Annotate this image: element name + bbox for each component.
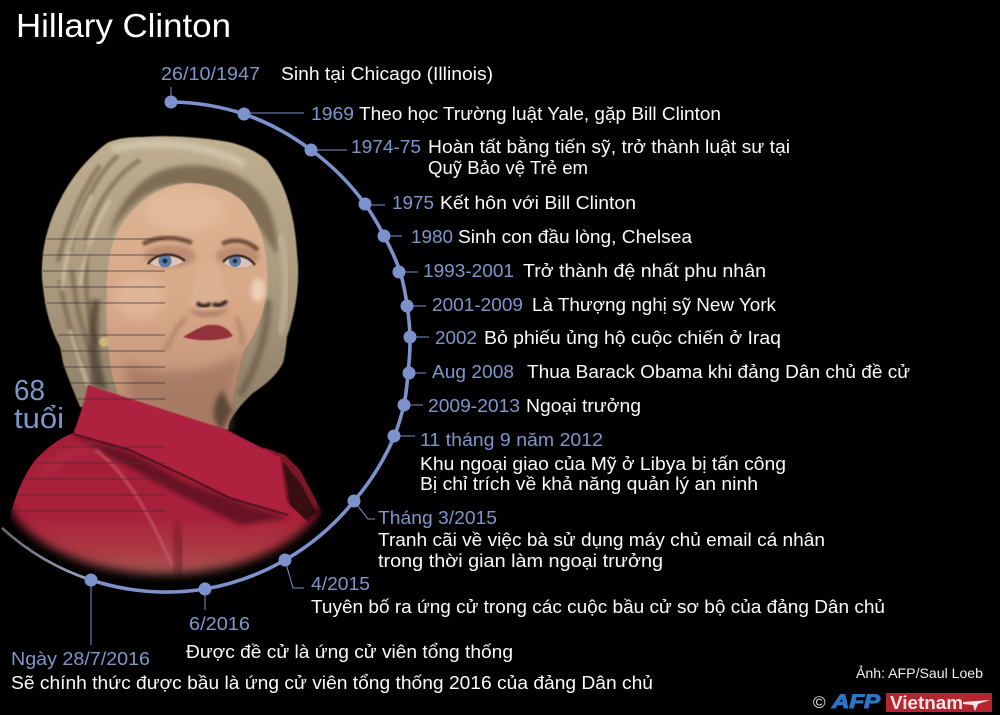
event: 1974-75: Hoàn tất bằng tiến sỹ, trở thành luật sư tại — [428, 136, 790, 157]
forehead highlight — [148, 197, 222, 228]
lips — [183, 325, 233, 340]
event: 2002: Bỏ phiếu ủng hộ cuộc chiến ở Iraq — [484, 328, 781, 348]
eye socket shade — [144, 245, 196, 267]
cheek highlights — [116, 276, 164, 320]
nose — [192, 275, 225, 308]
event: 2001-2009: Là Thượng nghị sỹ New York — [532, 295, 777, 315]
event: 1974-75: 1974-75 — [351, 137, 421, 157]
eyebrows — [143, 238, 258, 250]
age label — [14, 375, 64, 435]
logo: AFP Vietnam+: © — [813, 693, 826, 712]
event: 2009-2013: Ngoại trưởng — [526, 396, 641, 416]
portrait lines — [10, 239, 165, 511]
hair — [42, 136, 298, 427]
event: 3/2015: Tháng 3/2015 — [378, 508, 497, 528]
event: 2009-2013 — [428, 396, 641, 416]
event: 3/2015: Tranh cãi về việc bà sử dụng máy chủ email cá nhân — [378, 530, 825, 550]
sleeve seam — [95, 450, 172, 565]
event: 11/9/2012: Bị chỉ trích về khả năng quản lý an ninh — [420, 474, 758, 494]
event: 4/2015: Tuyên bố ra ứng cử trong các cuộc bầu cử sơ bộ của đảng Dân chủ — [311, 597, 885, 617]
event: birth: Sinh tại Chicago (Illinois) — [281, 64, 493, 84]
age label: 68 — [14, 375, 45, 407]
event: 2002: 2002 — [435, 328, 477, 348]
event: 1974-75: Quỹ Bảo vệ Trẻ em — [428, 158, 588, 178]
event: 4/2015: 4/2015 — [311, 574, 370, 594]
event: birth: 26/10/1947 — [161, 64, 260, 84]
event: 1993-2001 — [423, 261, 766, 281]
timeline dots — [84, 96, 416, 596]
event: 6/2016: 6/2016 — [189, 614, 250, 634]
logo: AFP Vietnam+ — [813, 692, 992, 713]
event: Aug 2008: Thua Barack Obama khi đảng Dân chủ đề cử — [527, 362, 910, 382]
event: 3/2015 — [378, 508, 825, 571]
event: 1969: 1969 — [311, 104, 354, 124]
event: 3/2015: trong thời gian làm ngoại trưởng — [378, 551, 663, 571]
connector lines — [91, 87, 429, 645]
event: birth — [161, 64, 493, 84]
earring — [99, 337, 109, 347]
event: 1975: Kết hôn với Bill Clinton — [440, 193, 636, 213]
event: 1980: Sinh con đầu lòng, Chelsea — [458, 227, 693, 247]
event: 11/9/2012: Khu ngoại giao của Mỹ ở Libya bị tấn công — [420, 454, 786, 474]
face and neck — [99, 183, 267, 432]
event: 2001-2009: 2001-2009 — [432, 295, 523, 315]
smile lines — [166, 318, 242, 350]
event: Aug 2008: Aug 2008 — [432, 362, 514, 382]
event: 2001-2009 — [432, 295, 777, 315]
collar shadow — [72, 436, 288, 525]
parting shadow — [108, 165, 277, 255]
event: 1975: 1975 — [392, 193, 434, 213]
logo: AFP Vietnam+: AFP — [831, 692, 880, 713]
event: 6/2016: Được đề cử là ứng cử viên tổng thống — [186, 642, 513, 662]
event: 1993-2001: 1993-2001 — [423, 261, 514, 281]
event: 11/9/2012 — [420, 430, 786, 494]
event: 1993-2001: Trở thành đệ nhất phu nhân — [523, 261, 766, 281]
event: 11/9/2012: 11 tháng 9 năm 2012 — [420, 430, 603, 450]
event: 28/7/2016: Sẽ chính thức được bầu là ứng cử viên tổng thống 2016 của đảng Dân chủ — [11, 673, 653, 693]
eyes — [150, 256, 183, 267]
jacket — [10, 384, 322, 582]
portrait photo — [0, 136, 330, 600]
event: 2009-2013: 2009-2013 — [428, 396, 520, 416]
photo credit: Ảnh: AFP/Saul Loeb — [856, 665, 983, 681]
collar — [73, 385, 288, 515]
arc tail — [2, 528, 91, 580]
age label: tuổi — [14, 403, 64, 435]
logo: AFP Vietnam+: Vietnam — [890, 693, 963, 713]
event: 4/2015 — [311, 574, 885, 617]
right back collar — [263, 447, 321, 522]
event: 1980: 1980 — [411, 227, 453, 247]
event: 6/2016 — [186, 614, 513, 662]
event: 28/7/2016: Ngày 28/7/2016 — [11, 649, 150, 669]
event: 1974-75 — [351, 136, 790, 178]
event: 28/7/2016 — [11, 649, 653, 693]
title: Hillary Clinton — [16, 7, 231, 44]
hair strands — [58, 155, 140, 365]
event: 1969: Theo học Trường luật Yale, gặp Bill Clinton — [359, 104, 721, 124]
timeline arc — [91, 102, 410, 592]
shading under chin — [125, 352, 243, 432]
